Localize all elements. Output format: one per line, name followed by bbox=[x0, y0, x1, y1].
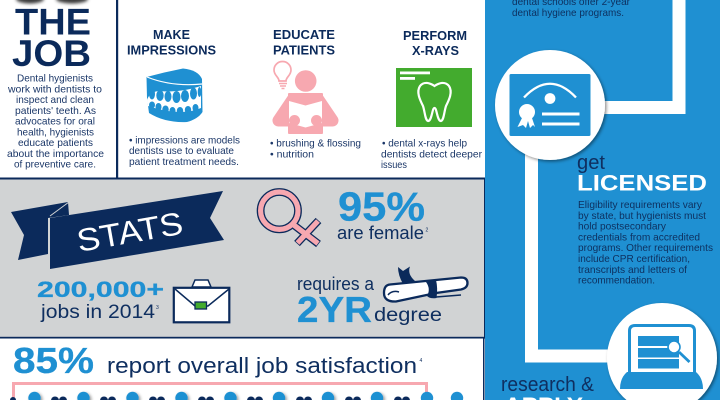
text: impressions bullet bbox=[129, 135, 240, 168]
stat: female percentage: 2 bbox=[426, 228, 428, 234]
icon: laptop search bbox=[607, 303, 717, 400]
text: licensing requirements: credentials from accredited bbox=[578, 232, 700, 243]
text: job description bbox=[7, 74, 104, 171]
text: job description: patients' teeth. As bbox=[15, 106, 96, 117]
icon: dentures bbox=[146, 68, 202, 122]
text: licensing requirements: recommendation. bbox=[578, 276, 655, 287]
chart: pictogram of people bbox=[10, 384, 463, 400]
text: licensing requirements: by state, but hygienists must bbox=[578, 211, 706, 222]
stat: jobs bbox=[37, 277, 164, 323]
heading: educate patients: EDUCATE bbox=[273, 28, 335, 42]
stat: female percentage: are female bbox=[337, 223, 424, 243]
heading: get licensed: get bbox=[577, 152, 605, 174]
icon: tooth x-ray bbox=[396, 68, 472, 127]
banner: stats ribbon: STATS bbox=[74, 205, 186, 259]
stat: 85 percent: report overall job satisfaction bbox=[107, 353, 417, 378]
heading: perform x-rays: PERFORM bbox=[403, 29, 467, 43]
heading: perform x-rays: X-RAYS bbox=[412, 44, 459, 58]
heading: the job: JOB bbox=[12, 33, 91, 74]
text: x-ray bullet: • dental x-rays help bbox=[382, 139, 467, 150]
heading: perform x-rays bbox=[403, 29, 467, 58]
icon: license certificate bbox=[495, 50, 605, 160]
icon: diploma bbox=[384, 266, 468, 302]
stat: 85 percent: 4 bbox=[420, 358, 422, 364]
text: licensing requirements: programs. Other requirements bbox=[578, 243, 713, 254]
icon: female symbol bbox=[261, 192, 318, 244]
text: x-ray bullet bbox=[381, 139, 483, 171]
heading: the job: THE bbox=[15, 2, 91, 42]
heading: make impressions: IMPRESSIONS bbox=[127, 44, 216, 58]
text: job description: work with dentists to bbox=[7, 84, 102, 95]
text: educate bullets: • brushing & flossing bbox=[270, 139, 361, 150]
text: impressions bullet: patient treatment needs. bbox=[129, 157, 239, 168]
icon: briefcase bbox=[174, 280, 229, 322]
panel: make impressions bbox=[127, 28, 240, 168]
text: impressions bullet: • impressions are models bbox=[129, 135, 240, 146]
panel: perform x-rays bbox=[381, 29, 483, 171]
icon: person reading with light bulb bbox=[274, 62, 332, 134]
text: job description: advocates for oral bbox=[15, 117, 95, 128]
heading: research and apply: research & bbox=[501, 374, 595, 396]
heading: educate patients bbox=[273, 28, 335, 58]
text: dental schools bbox=[512, 0, 631, 19]
text: x-ray bullet: dentists detect deeper bbox=[381, 149, 483, 160]
stat: female percentage bbox=[337, 184, 428, 243]
panel: stats bbox=[0, 180, 485, 337]
panel: career path bbox=[485, 0, 720, 400]
heading: get licensed: LICENSED bbox=[577, 171, 707, 196]
stat: degree bbox=[297, 274, 442, 330]
text: x-ray bullet: issues bbox=[381, 160, 407, 171]
text: dental schools: dental hygiene programs. bbox=[512, 8, 624, 19]
text: educate bullets: • nutrition bbox=[270, 149, 314, 160]
stat: degree: requires a bbox=[297, 274, 375, 294]
banner: stats ribbon bbox=[11, 191, 224, 269]
text: licensing requirements: hold postsecondary bbox=[578, 222, 667, 233]
text: job description: inspect and clean bbox=[16, 95, 94, 106]
heading: educate patients: PATIENTS bbox=[273, 44, 335, 58]
text: job description: Dental hygienists bbox=[17, 74, 93, 85]
heading: get licensed bbox=[577, 152, 707, 196]
text: licensing requirements: transcripts and letters of bbox=[578, 265, 687, 276]
stat: jobs: jobs in 2014 bbox=[40, 302, 155, 323]
stat: degree: 2YR bbox=[297, 289, 372, 330]
text: job description: about the importance bbox=[7, 149, 104, 160]
text: job description: health, hygienists bbox=[17, 128, 94, 138]
stat: female percentage: 95% bbox=[338, 184, 425, 230]
text: licensing requirements: include CPR certification, bbox=[578, 254, 690, 265]
stat: 85 percent: 85% bbox=[13, 340, 94, 381]
stat: jobs: 3 bbox=[156, 305, 159, 311]
panel: job satisfaction bbox=[0, 338, 484, 400]
text: impressions bullet: dentists use to evaluate bbox=[129, 146, 234, 157]
heading: make impressions bbox=[127, 28, 216, 58]
text: job description: of preventive care. bbox=[14, 160, 96, 171]
heading: make impressions: MAKE bbox=[153, 28, 190, 42]
stat: degree: degree bbox=[374, 304, 442, 326]
text: licensing requirements: Eligibility requirements vary bbox=[578, 200, 703, 211]
text: job description: educate patients bbox=[18, 138, 93, 149]
text: educate bullets bbox=[270, 139, 361, 160]
connector: white path bbox=[532, 0, 679, 356]
stat: jobs: 200,000+ bbox=[37, 277, 164, 302]
text: licensing requirements bbox=[578, 200, 713, 287]
icon: cropped shadow at top bbox=[16, 0, 88, 4]
panel: the job intro bbox=[0, 0, 117, 178]
heading: the job bbox=[12, 2, 91, 74]
stat: 85 percent bbox=[13, 340, 422, 381]
panel: educate patients bbox=[270, 28, 361, 160]
